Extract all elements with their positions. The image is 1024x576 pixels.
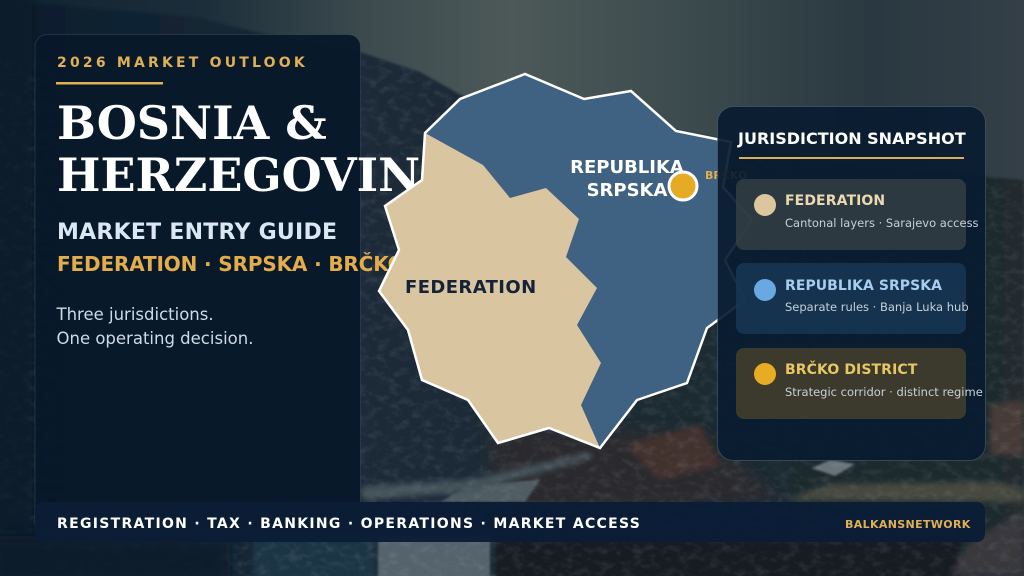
map label: Republika Srpska: SRPSKA [587,180,667,201]
subtitle: MARKET ENTRY GUIDE [57,220,337,245]
eyebrow: 2026 MARKET OUTLOOK [57,55,308,71]
card: Federation: Cantonal layers · Sarajevo access [785,216,979,230]
heading rule [739,157,964,159]
card: Federation: FEDERATION [785,193,885,209]
map label: Brčko: BRČKO [705,169,747,182]
card: Brčko District: BRČKO DISTRICT [785,360,918,378]
eyebrow rule [56,82,163,84]
map outline [379,74,752,448]
map marker: Brčko [669,172,697,200]
map label: Republika Srpska: REPUBLIKA [570,157,684,178]
map label: Federation: FEDERATION [405,277,537,298]
map: Bosnia and Herzegovina jurisdictions [379,74,752,448]
panel: left intro card [35,34,360,534]
card: Republika Srpska [736,263,969,334]
map region: Federation [379,133,601,448]
card: Republika Srpska: Separate rules · Banja Luka hub [785,300,969,314]
footer topics: REGISTRATION · TAX · BANKING · OPERATIONS · MARKET ACCESS [57,516,641,532]
tagline: One operating decision. [56,329,253,348]
panel heading: JURISDICTION SNAPSHOT [737,129,966,148]
footer bar [35,502,985,542]
footer brand: BALKANSNETWORK [845,518,971,531]
card: Republika Srpska: REPUBLIKA SRPSKA [785,278,942,294]
tagline: Three jurisdictions. [56,305,214,324]
title: BOSNIA & [57,96,327,150]
card: Brčko District: Strategic corridor · distinct regime [785,385,983,399]
map region: Republika Srpska [379,74,752,448]
title: HERZEGOVINA [57,148,457,202]
jurisdictions line: FEDERATION · SRPSKA · BRČKO [57,252,405,276]
card: Federation [736,179,979,250]
panel: jurisdiction snapshot [718,106,986,460]
card: Brčko District [736,348,983,419]
